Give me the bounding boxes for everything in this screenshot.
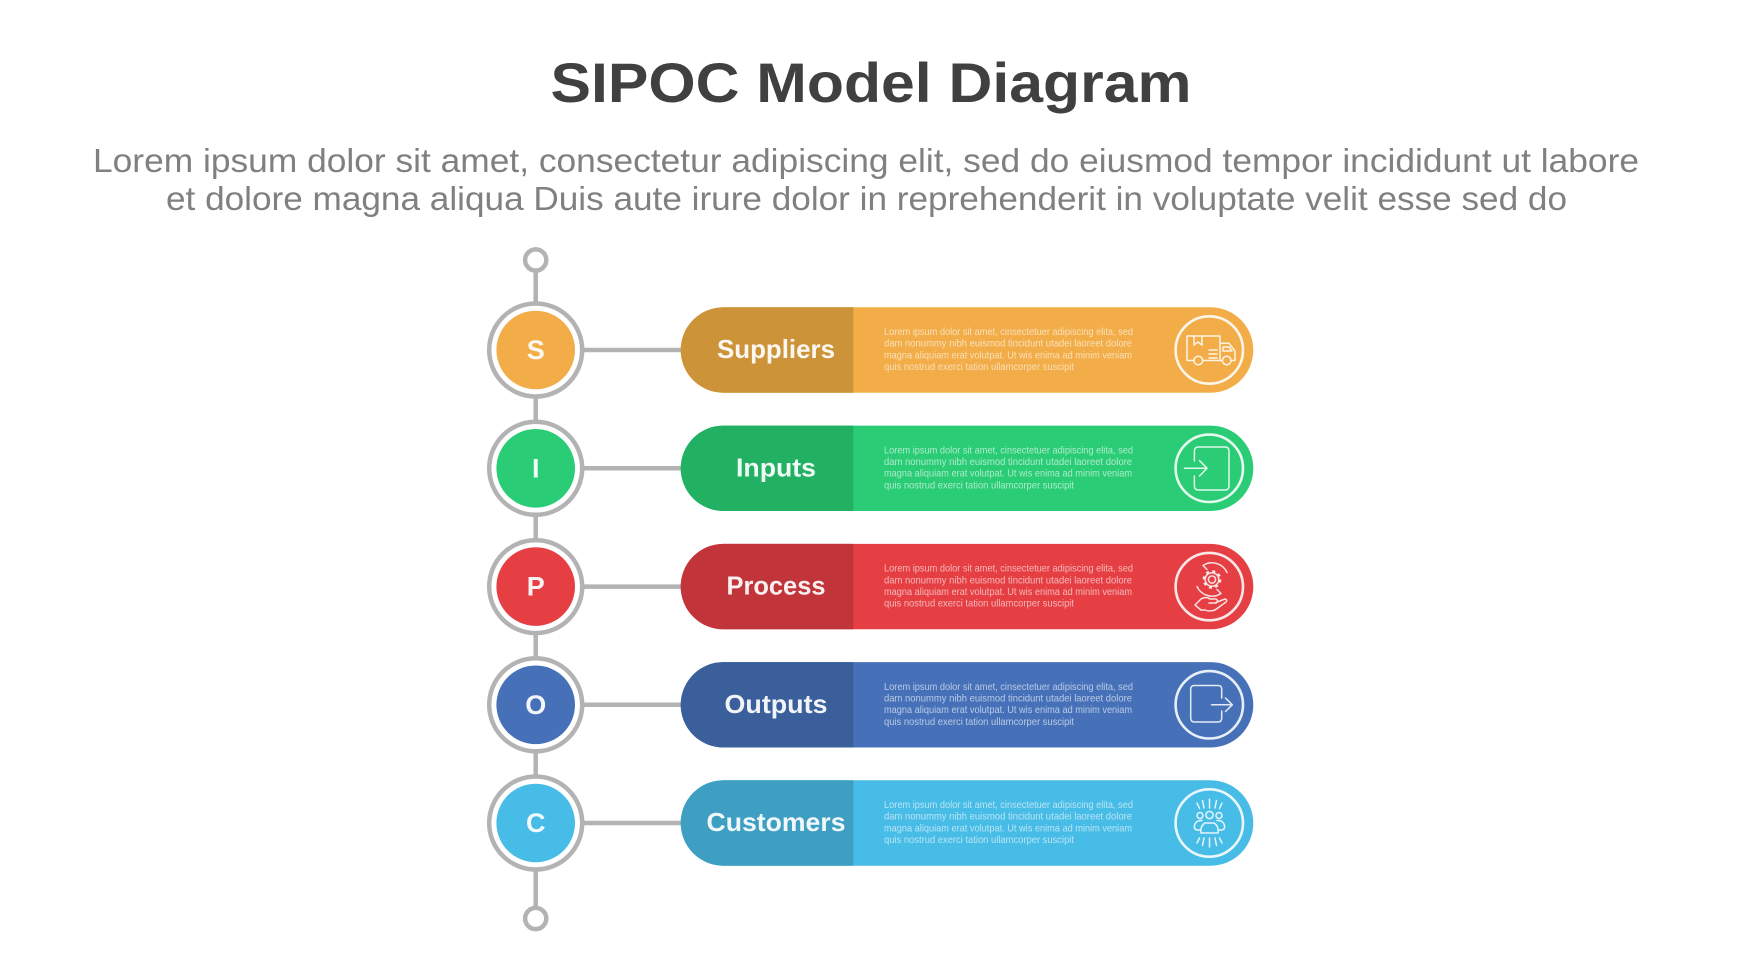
pill: Process: Lorem ipsum dolor sit amet, cinsectetuer adipiscing elita, sed (884, 564, 1133, 575)
pill: Outputs: dam nonummy nibh euismod tincidunt utadei laoreet dolore (884, 694, 1132, 704)
pill: Process: Process (726, 571, 826, 601)
node: O (489, 658, 582, 751)
node: I (489, 422, 582, 515)
pill: Inputs: quis nostrud exerci tation ullamcorper suscipit (884, 480, 1074, 491)
icon: arrow into box (1176, 435, 1243, 502)
pill: Process: dam nonummy nibh euismod tincidunt utadei laoreet dolore (884, 575, 1132, 586)
pill: Process: magna aliquiam erat volutpat. Ut wis enima ad minim veniam (884, 587, 1132, 598)
pill: Outputs: magna aliquiam erat volutpat. Ut wis enima ad minim veniam (884, 705, 1132, 716)
timeline spine (525, 249, 546, 929)
row: Process (489, 540, 1253, 633)
icon: gear over hand (1176, 553, 1243, 620)
row: Outputs (489, 658, 1253, 751)
row: Suppliers (489, 304, 1253, 396)
pill: Suppliers: Lorem ipsum dolor sit amet, cinsectetuer adipiscing elita, sed (884, 327, 1133, 338)
node: C: C (526, 808, 545, 838)
pill: Suppliers: dam nonummy nibh euismod tincidunt utadei laoreet dolore (884, 339, 1132, 350)
pill: Inputs: dam nonummy nibh euismod tincidunt utadei laoreet dolore (884, 457, 1132, 468)
row: Inputs (489, 422, 1253, 515)
pill: Customers: Customers (706, 807, 846, 837)
pill: Outputs (681, 662, 1253, 748)
row: Customers (489, 776, 1253, 870)
pill: Process: quis nostrud exerci tation ullamcorper suscipit (884, 599, 1074, 610)
pill: Customers: magna aliquiam erat volutpat. Ut wis enima ad minim veniam (884, 823, 1132, 834)
pill: Customers: dam nonummy nibh euismod tincidunt utadei laoreet dolore (884, 812, 1132, 823)
pill: Process (681, 544, 1253, 629)
pill: Customers: quis nostrud exerci tation ullamcorper suscipit (884, 835, 1074, 846)
subtitle: Lorem ipsum dolor sit amet, consectetur adipiscing elit, sed do eiusmod tempor incididunt ut labore (93, 142, 1639, 179)
subtitle (93, 142, 1639, 217)
pill: Outputs: Outputs (724, 689, 828, 719)
pill: Suppliers (681, 307, 1253, 393)
pill: Suppliers: Suppliers (717, 334, 835, 364)
icon: customers group (1176, 789, 1243, 857)
node: P (489, 540, 582, 633)
node: O: O (525, 690, 546, 720)
pill: Suppliers: magna aliquiam erat volutpat. Ut wis enima ad minim veniam (884, 350, 1132, 361)
node: S: S (527, 335, 545, 365)
subtitle: et dolore magna aliqua Duis aute irure dolor in reprehenderit in voluptate velit esse sed do (166, 180, 1567, 217)
icon: truck (1176, 316, 1243, 384)
pill: Suppliers: quis nostrud exerci tation ullamcorper suscipit (884, 362, 1074, 373)
node: C (489, 776, 582, 870)
pill: Customers: Lorem ipsum dolor sit amet, cinsectetuer adipiscing elita, sed (884, 800, 1133, 811)
node: S (489, 304, 582, 396)
pill: Outputs: Lorem ipsum dolor sit amet, cinsectetuer adipiscing elita, sed (884, 682, 1133, 693)
title: SIPOC Model Diagram (550, 51, 1192, 114)
pill: Inputs: Inputs (736, 452, 816, 482)
pill: Outputs: quis nostrud exerci tation ullamcorper suscipit (884, 717, 1074, 728)
node: I: I (532, 453, 539, 483)
icon: arrow out of box (1176, 671, 1243, 738)
pill: Inputs: magna aliquiam erat volutpat. Ut wis enima ad minim veniam (884, 469, 1132, 480)
pill: Inputs: Lorem ipsum dolor sit amet, cinsectetuer adipiscing elita, sed (884, 445, 1133, 456)
pill: Customers (681, 780, 1253, 866)
node: P: P (527, 572, 545, 602)
pill: Inputs (681, 426, 1253, 511)
